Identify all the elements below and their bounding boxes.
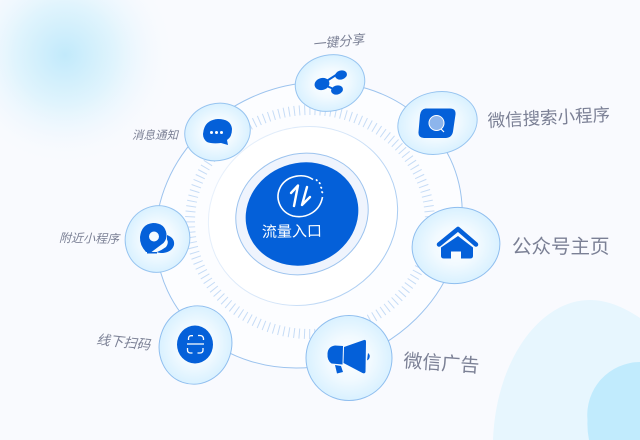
background circle bottom right [587, 362, 640, 440]
node: share [290, 48, 370, 118]
label: ad: 微信广告 [403, 350, 480, 377]
label: messages: 消息通知 [132, 129, 179, 142]
icon: scan [177, 326, 213, 364]
icon: search [418, 108, 456, 138]
centre hub [219, 135, 385, 293]
hub logo [278, 176, 322, 217]
label: scan: 线下扫码 [96, 332, 152, 353]
icon: nearby [140, 223, 174, 254]
middle ring [179, 96, 427, 336]
icon: message bubble [203, 119, 232, 145]
hub blue disc [231, 147, 373, 281]
hub label: 流量入口 [262, 223, 322, 241]
icon: home [439, 229, 476, 258]
label: nearby: 附近小程序 [59, 231, 121, 246]
hub outer disc [219, 135, 385, 293]
node: ad [306, 316, 392, 400]
label: share: 一键分享 [312, 31, 367, 52]
node: home [407, 202, 505, 289]
outer ring [108, 32, 510, 418]
node: messages [178, 96, 257, 168]
label: search: 微信搜索小程序 [487, 105, 611, 131]
background shape bottom right [493, 300, 640, 440]
label: home: 公众号主页 [512, 236, 610, 258]
background glow top left [0, 0, 180, 170]
node: mini program search [392, 84, 483, 162]
icon: share [314, 70, 347, 95]
tick ring [190, 110, 430, 334]
node: scan [149, 296, 242, 394]
node: nearby [114, 195, 201, 283]
icon: megaphone [327, 340, 370, 374]
